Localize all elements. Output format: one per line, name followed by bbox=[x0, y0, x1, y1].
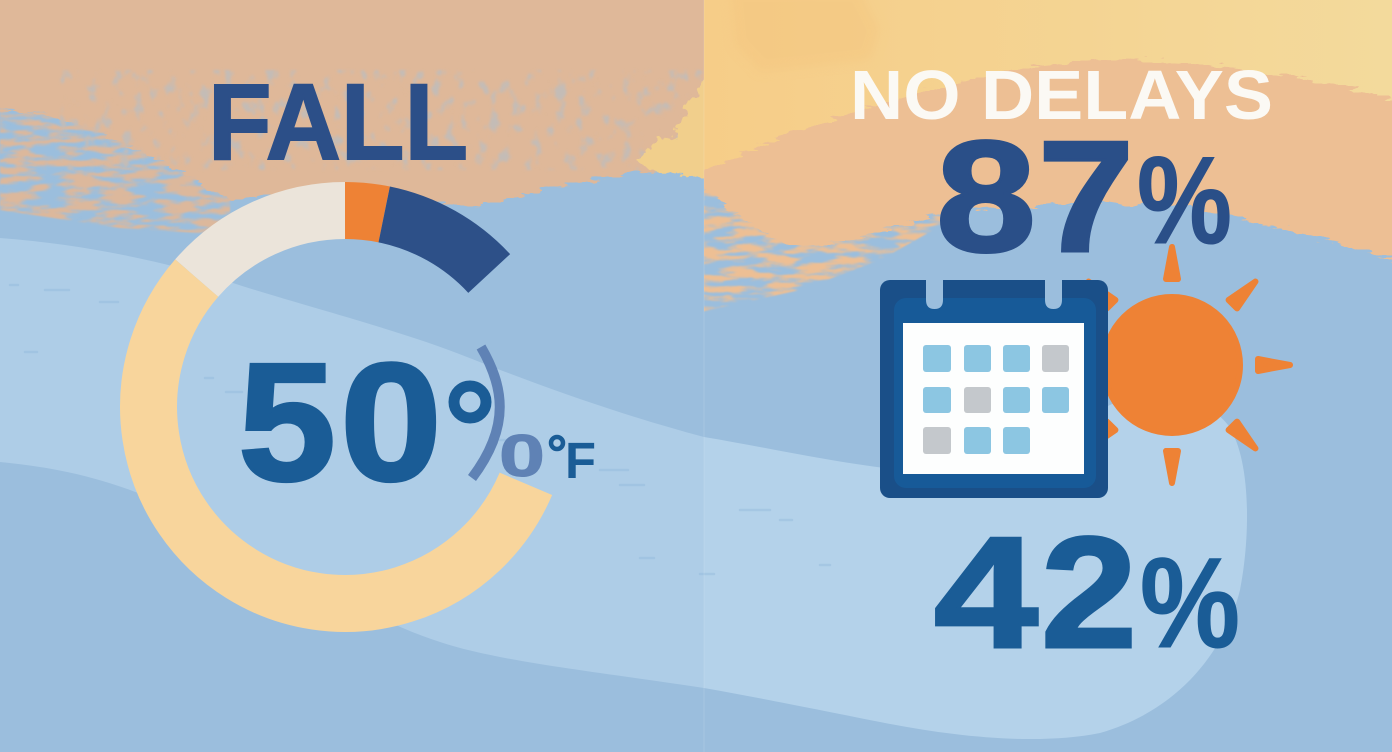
donut segment: peach bbox=[149, 278, 526, 603]
heading: FALL: FALL bbox=[208, 61, 468, 182]
panel seam bbox=[704, 0, 705, 752]
donut segment: cream bbox=[197, 210, 345, 278]
donut chart bbox=[149, 210, 526, 603]
calendar binding notches bbox=[926, 280, 1062, 309]
stat: 87%: 7 bbox=[1038, 109, 1134, 285]
stat: 87% bbox=[936, 109, 1232, 285]
small degree ring bbox=[551, 437, 563, 449]
background: paint flecks on wave bbox=[10, 285, 830, 574]
background: yellow smudge at seam bbox=[636, 80, 704, 178]
background: left peach brush band bbox=[0, 0, 740, 235]
donut center value: 50° bbox=[238, 328, 486, 516]
stat: 42% bbox=[934, 505, 1240, 681]
icon: calendar bbox=[880, 280, 1108, 498]
calendar day cells bbox=[923, 345, 1069, 454]
stat: 42%: 4 bbox=[934, 505, 1038, 681]
donut center value: 50°: 5 bbox=[238, 328, 336, 516]
calendar page bbox=[903, 323, 1084, 474]
background: right yellow sky bbox=[704, 0, 1392, 330]
stat: 42%: 2 bbox=[1041, 505, 1137, 681]
label: 0°F: 0 bbox=[499, 423, 545, 489]
background: right blue lower field bbox=[704, 188, 1392, 330]
heading: NO DELAYS: NO DELAYS bbox=[850, 56, 1273, 134]
label: 0°F bbox=[499, 423, 596, 489]
degree ring bbox=[454, 386, 486, 418]
icon: sun bbox=[1084, 247, 1290, 483]
background: light blue blob, right bbox=[704, 395, 1247, 739]
donut segment: navy bbox=[384, 214, 489, 274]
stat: 87%: 8 bbox=[936, 109, 1036, 285]
arc divider bbox=[472, 347, 500, 478]
background: right peach brush band bbox=[704, 56, 1392, 312]
donut segment: orange bbox=[345, 210, 384, 214]
stat: 87%: % bbox=[1137, 132, 1232, 270]
donut center value: 50°: 0 bbox=[340, 328, 442, 516]
background: light blue wave, left bbox=[0, 238, 704, 688]
stat: 42%: % bbox=[1140, 532, 1240, 675]
label: 0°F: F bbox=[565, 432, 596, 489]
